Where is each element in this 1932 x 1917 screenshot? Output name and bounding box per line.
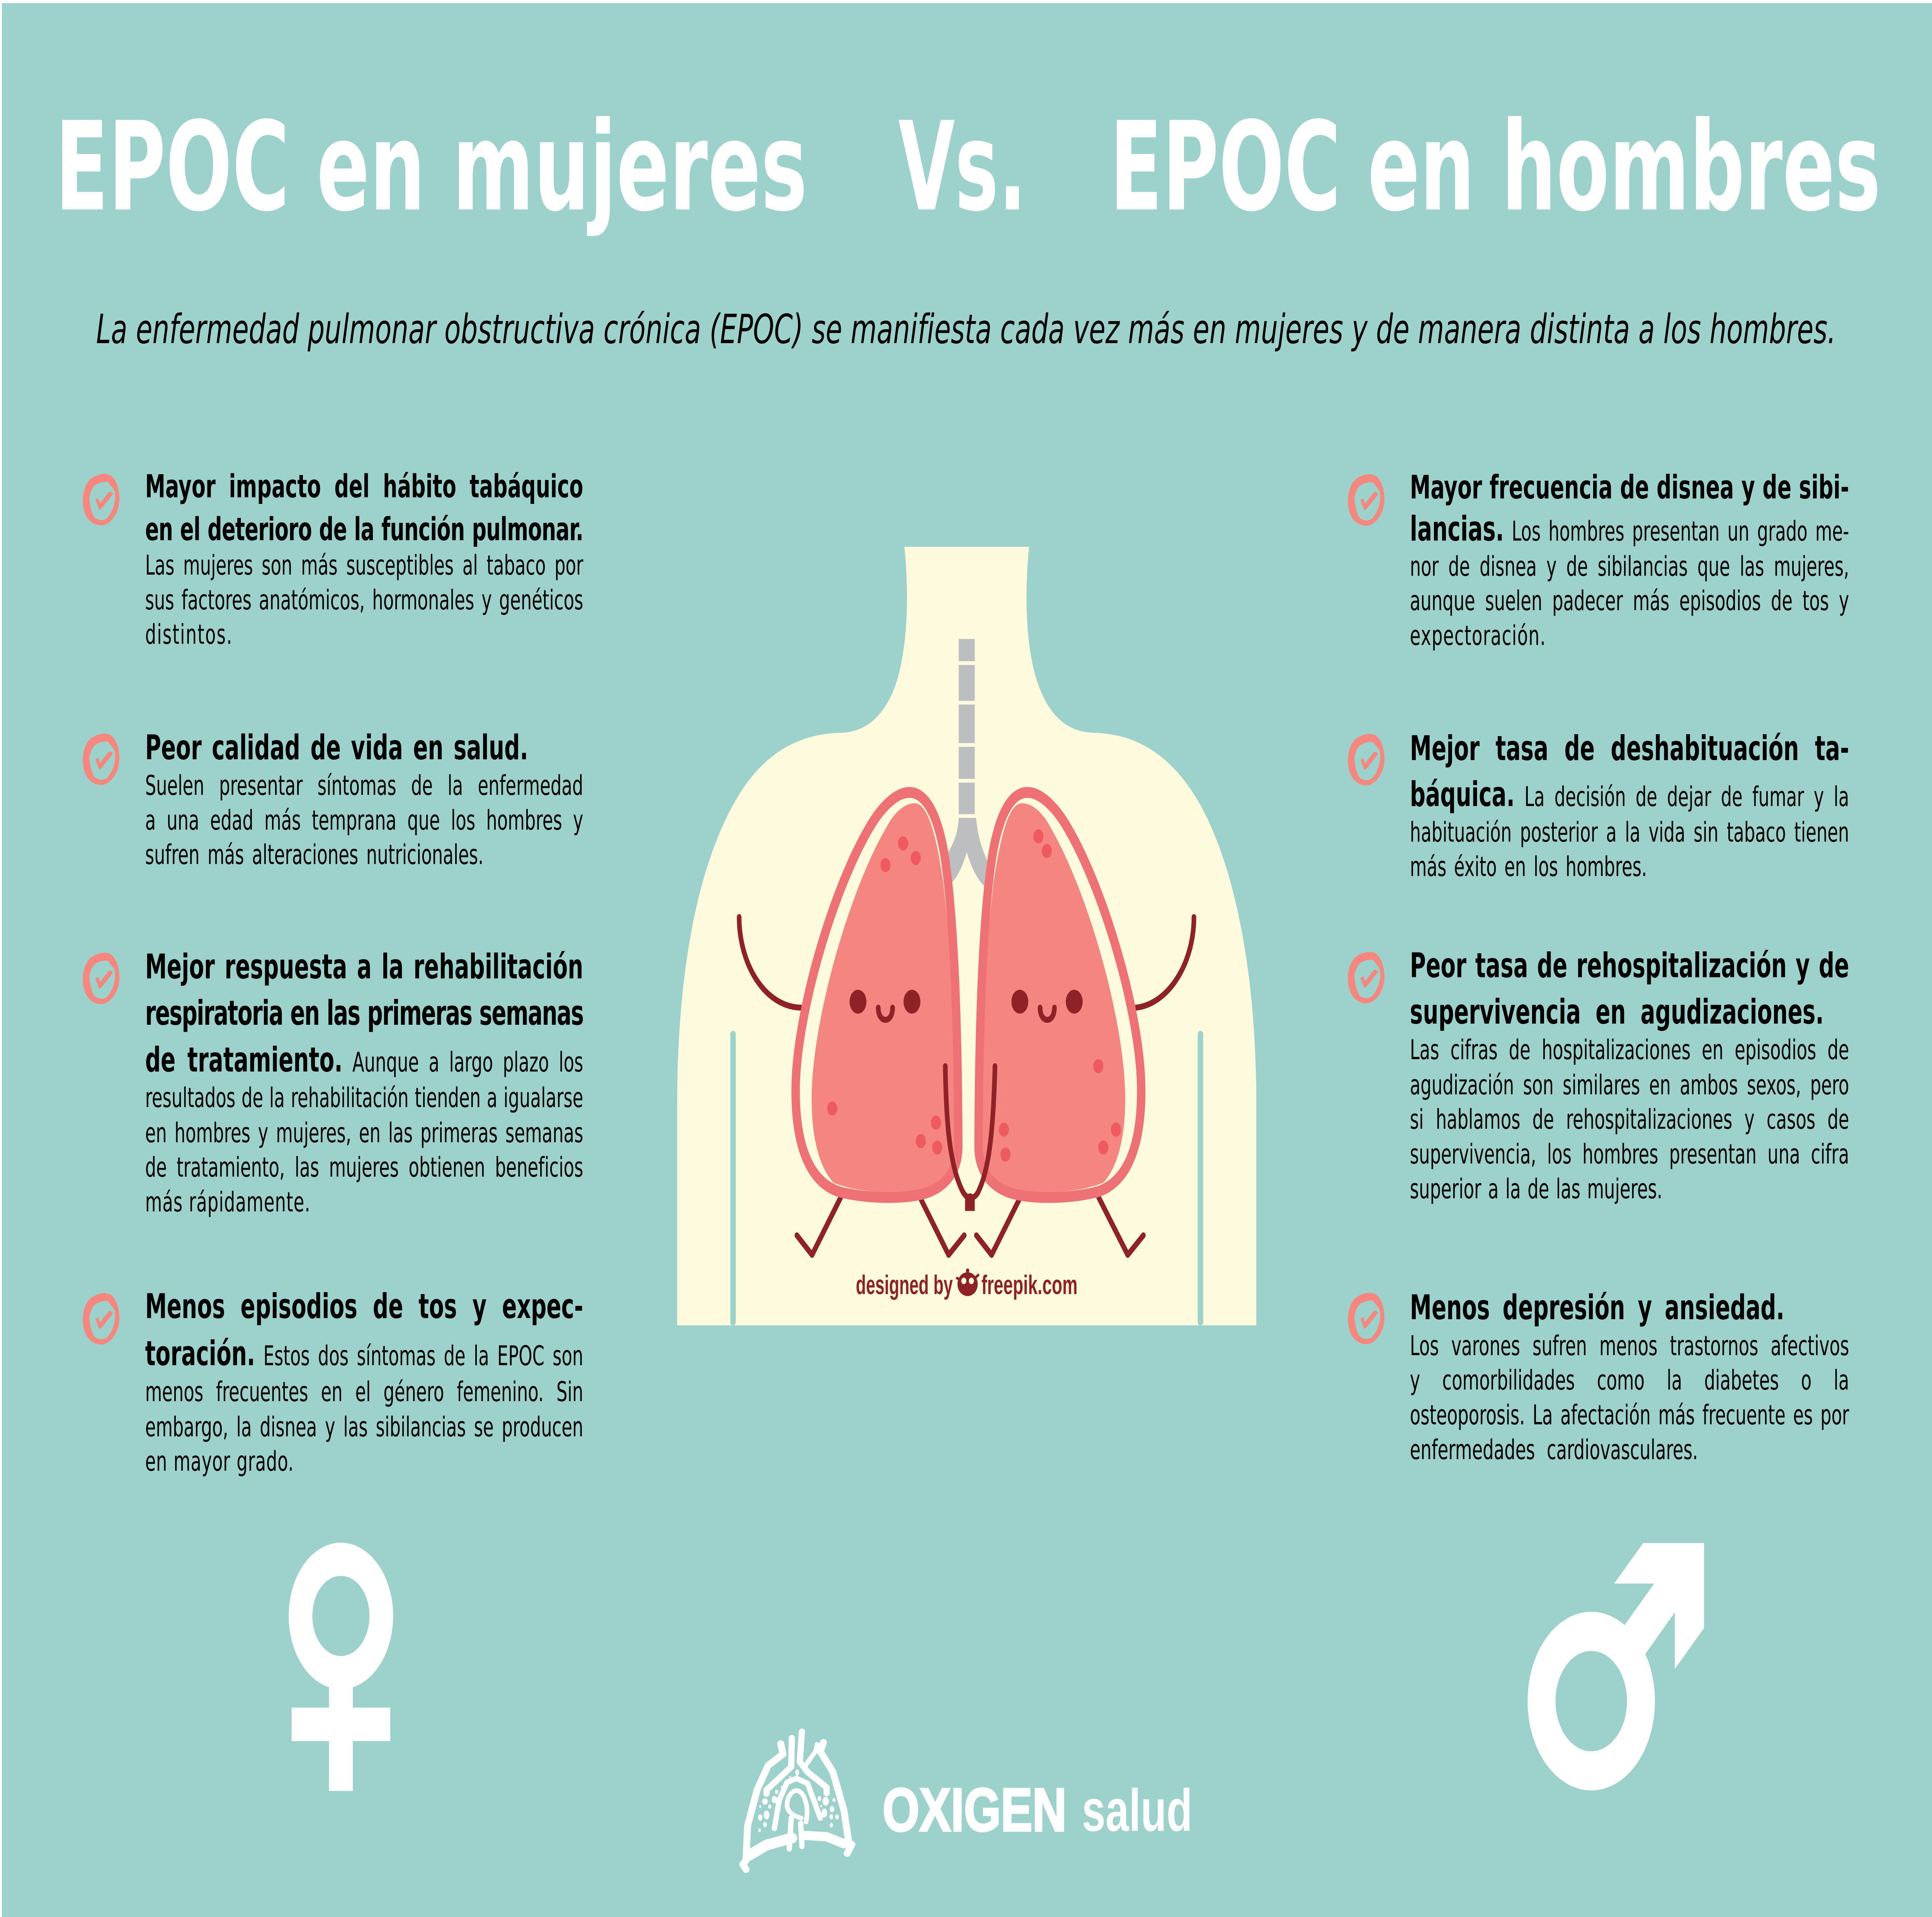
logo wordmark: salud (1082, 1778, 1192, 1844)
icon: check left 4 (83, 1293, 119, 1344)
body: osteoporosis. La afectación más frecuente es por (1410, 1399, 1849, 1431)
lung faces (850, 990, 1083, 1020)
heading: respiratoria en las primeras semanas (145, 993, 583, 1033)
holding hands (945, 1066, 995, 1211)
icon: check right 3 (1348, 952, 1384, 1003)
body: distintos. (145, 619, 233, 650)
body (145, 546, 583, 654)
body: más éxito en los hombres. (1410, 851, 1647, 883)
body: menos frecuentes en el género femenino. Sin (145, 1376, 583, 1408)
body: si hablamos de rehospitalizaciones y casos de (1410, 1104, 1849, 1135)
text block: right 2 (1410, 729, 1849, 886)
heading: Menos depresión y ansiedad. (1410, 1288, 1784, 1327)
credit text: designed by (856, 1270, 953, 1300)
body (1410, 813, 1849, 886)
heading: Peor tasa de rehospitalización y de (1410, 946, 1849, 985)
body: superior a la de las mujeres. (1410, 1173, 1662, 1205)
credit text (856, 1270, 1078, 1300)
heading: Mayor frecuencia de disnea y de sibi- (1410, 468, 1849, 506)
body: aunque suelen padecer más episodios de tos y (1410, 585, 1849, 617)
text block: left 2 (145, 728, 583, 874)
text block: left 4 (145, 1287, 583, 1481)
body (145, 1078, 583, 1221)
body (1410, 1327, 1849, 1469)
icon: check left 3 (83, 953, 119, 1004)
title: Vs.: Vs. (898, 96, 1026, 239)
body: más rápidamente. (145, 1186, 311, 1218)
body: de tratamiento, las mujeres obtienen beneficios (145, 1152, 583, 1183)
icon: freepik mascot (956, 1269, 979, 1296)
body (1410, 547, 1849, 655)
heading: toración. Estos dos síntomas de la EPOC son (145, 1334, 583, 1373)
icon: check right 2 (1348, 734, 1384, 785)
icon: male symbol (1542, 1543, 1704, 1771)
body: sufren más alteraciones nutricionales. (145, 839, 483, 871)
body: agudización son similares en ambos sexos, pero (1410, 1069, 1849, 1101)
heading (1410, 468, 1849, 548)
text block: left 1 (145, 468, 583, 654)
heading (145, 947, 583, 1079)
lung spots (827, 829, 1121, 1162)
heading: Menos episodios de tos y expec- (145, 1286, 583, 1326)
body: Los varones sufren menos trastornos afectivos (1410, 1330, 1849, 1362)
title: EPOC en mujeres: EPOC en mujeres (55, 96, 808, 239)
heading (1410, 729, 1849, 814)
text block: right 4 (1410, 1288, 1849, 1469)
body: resultados de la rehabilitación tienden a igualarse (145, 1082, 583, 1114)
heading: en el deterioro de la función pulmonar. (145, 511, 583, 548)
torso silhouette (677, 547, 1256, 1325)
body: embargo, la disnea y las sibilancias se producen (145, 1411, 583, 1443)
heading (145, 1287, 583, 1373)
trachea (945, 639, 992, 887)
icon: check right 4 (1348, 1293, 1384, 1344)
logo: OXIGEN salud (743, 1732, 1192, 1869)
heading (145, 468, 583, 545)
body: sus factores anatómicos, hormonales y genéticos (145, 584, 583, 616)
heading: báquica. La decisión de dejar de fumar y la (1410, 774, 1849, 814)
body: enfermedades cardiovasculares. (1410, 1434, 1698, 1466)
body: a una edad más temprana que los hombres y (145, 805, 583, 836)
heading: supervivencia en agudizaciones. (1410, 992, 1824, 1032)
icon: check left 2 (83, 733, 119, 785)
logo wordmark (883, 1776, 1192, 1844)
text block: right 3 (1410, 946, 1849, 1208)
heading (1410, 946, 1849, 1031)
illustration: torso with smiling lungs (677, 547, 1256, 1325)
heading: Mayor impacto del hábito tabáquico (145, 468, 583, 505)
left lung (796, 793, 958, 1197)
icon: female symbol (292, 1559, 390, 1791)
icon: check right 1 (1348, 474, 1384, 526)
logo wordmark: OXIGEN (883, 1776, 1066, 1844)
arm gaps (730, 1031, 1203, 1325)
text block: left 3 (145, 947, 583, 1221)
body: nor de disnea y de sibilancias que las mujeres, (1410, 551, 1849, 582)
body: Las cifras de hospitalizaciones en episodios de (1410, 1034, 1849, 1066)
heading: Peor calidad de vida en salud. (145, 728, 528, 767)
body: habituación posterior a la vida sin tabaco tienen (1410, 816, 1849, 848)
body: en hombres y mujeres, en las primeras semanas (145, 1117, 583, 1149)
title: EPOC en hombres: EPOC en hombres (1110, 96, 1881, 239)
right lung (978, 793, 1141, 1197)
body: Suelen presentar síntomas de la enfermedad (145, 770, 583, 801)
subtitle: La enfermedad pulmonar obstructiva crónica (EPOC) se manifiesta cada vez más en mujeres y de manera distinta a los hombres. (96, 306, 1836, 353)
logo icon: lungs outline (743, 1732, 852, 1869)
text block: right 1 (1410, 468, 1849, 655)
heading: de tratamiento. Aunque a largo plazo los (145, 1040, 583, 1080)
body: expectoración. (1410, 620, 1546, 651)
body (1410, 1031, 1849, 1208)
body: en mayor grado. (145, 1446, 294, 1477)
body (145, 1373, 583, 1481)
body: y comorbilidades como la diabetes o la (1410, 1364, 1849, 1396)
body: supervivencia, los hombres presentan una cifra (1410, 1138, 1849, 1170)
body (145, 766, 583, 874)
limbs (739, 917, 1194, 1255)
heading: lancias. Los hombres presentan un grado me- (1410, 509, 1849, 549)
heading: Mejor tasa de deshabituación ta- (1410, 728, 1849, 768)
heading: Mejor respuesta a la rehabilitación (145, 947, 583, 987)
credit text: freepik.com (981, 1270, 1078, 1300)
body: Las mujeres son más susceptibles al tabaco por (145, 549, 583, 581)
icon: check left 1 (83, 474, 119, 525)
